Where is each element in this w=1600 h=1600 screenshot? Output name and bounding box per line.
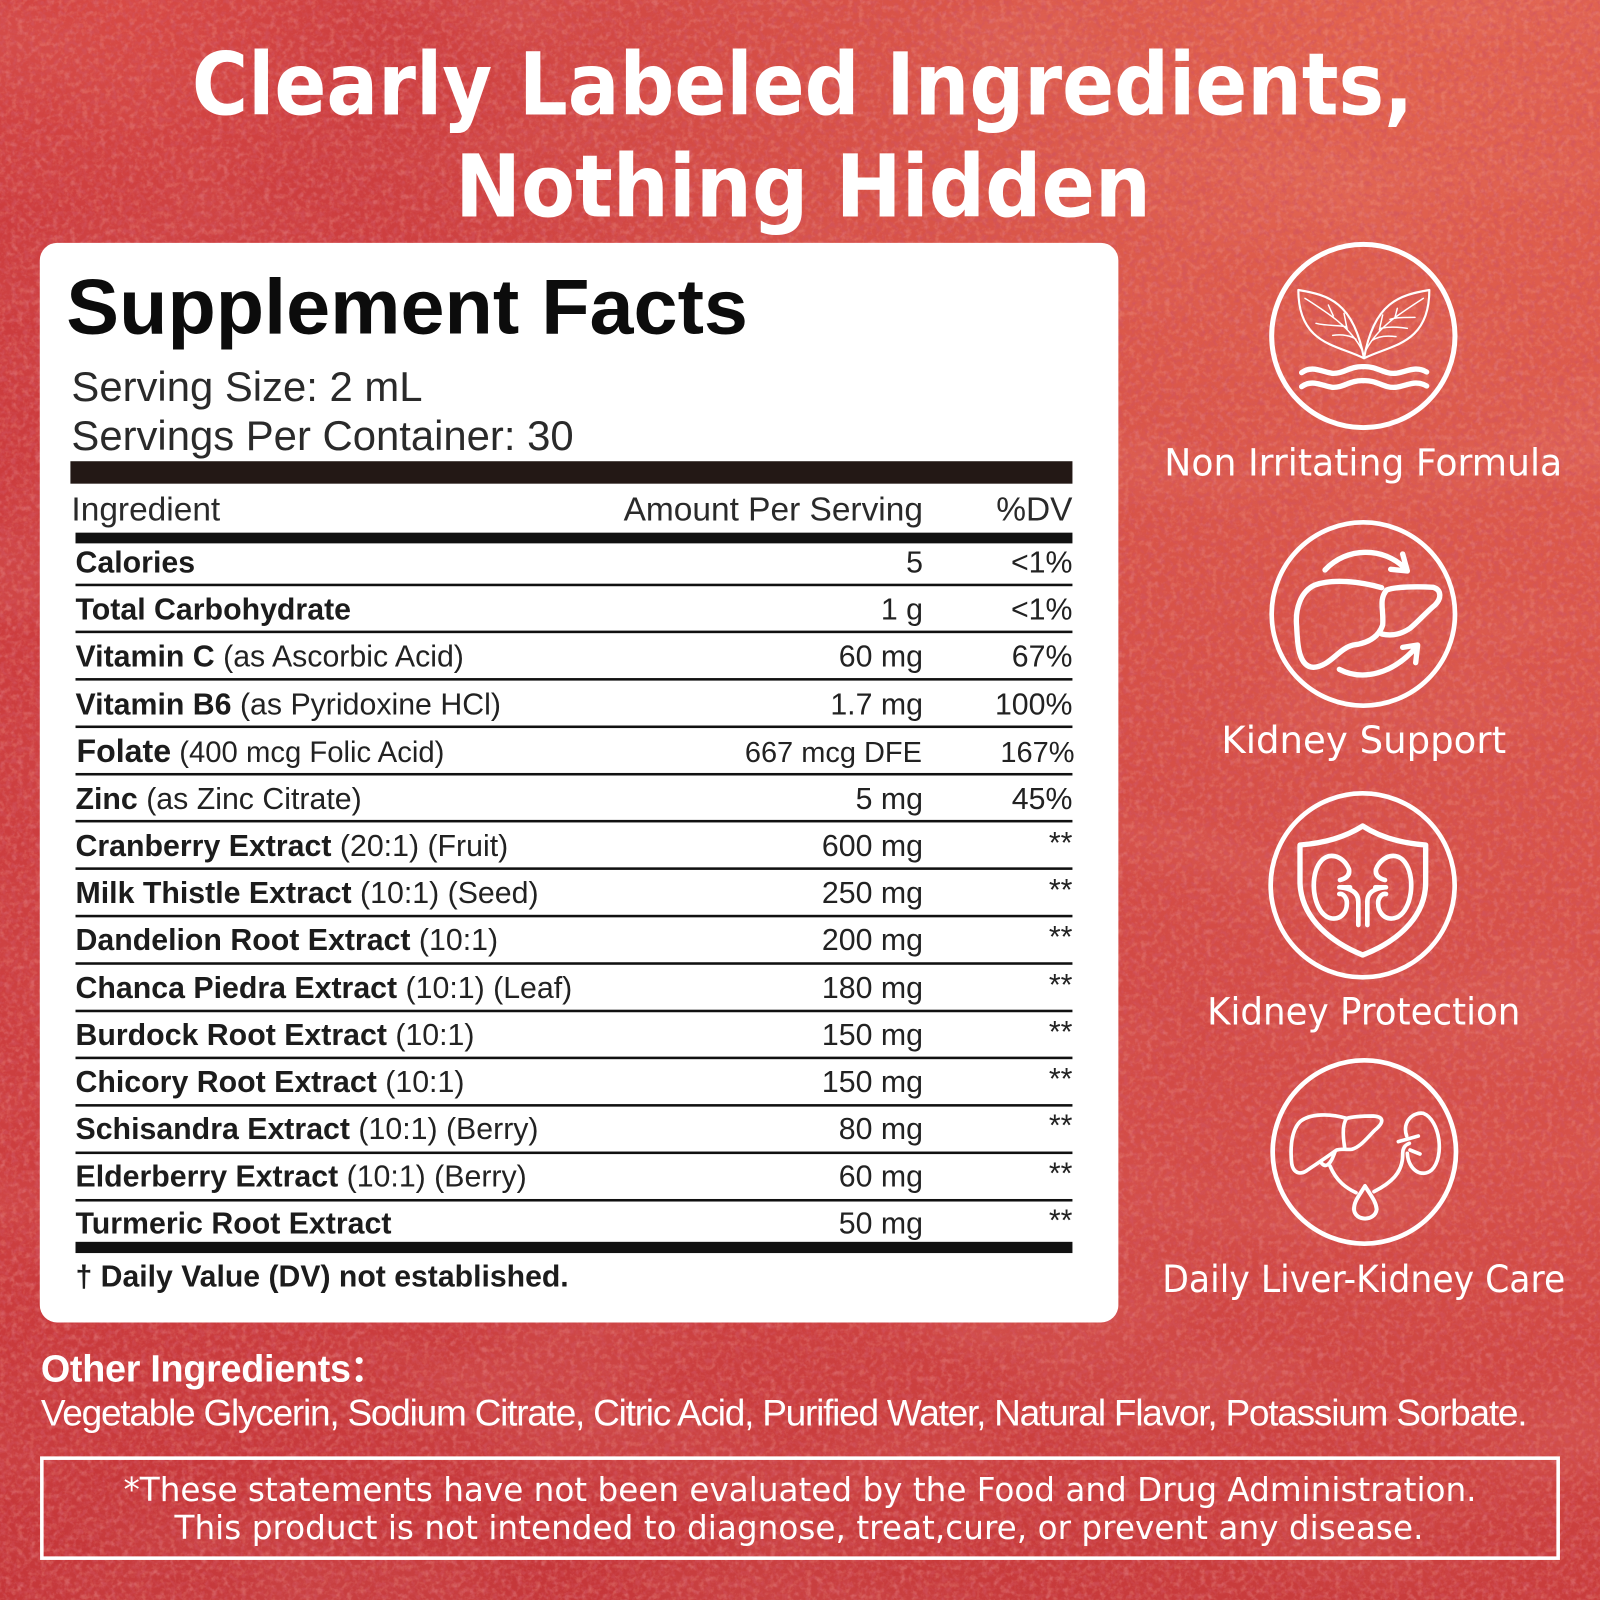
icon: shield with kidneys: [1271, 793, 1455, 977]
row: burdock: Burdock Root Extract (10:1): [76, 1019, 475, 1052]
disclaimer box: *These statements have not been evaluated by the Food and Drug Administration.: [123, 1471, 1477, 1509]
row: elderberry: Elderberry Extract (10:1) (Berry): [76, 1161, 527, 1194]
title: Nothing Hidden: [455, 136, 1151, 237]
row: burdock: [76, 1016, 1073, 1052]
row: turmeric: Turmeric Root Extract: [76, 1208, 391, 1241]
row: calories: Calories: [76, 546, 195, 579]
row: milk thistle: 250 mg: [822, 877, 923, 910]
icon: liver with arrows: [1272, 522, 1455, 706]
column headers: Ingredient: [71, 491, 221, 528]
column headers: %DV: [996, 491, 1073, 528]
row: chanca piedra: **: [1049, 969, 1073, 1002]
other ingredients: ：: [350, 1339, 387, 1393]
row: vitamin C: 60 mg: [839, 640, 923, 673]
row: calories: <1%: [1011, 546, 1072, 579]
row: folate: Folate (400 mcg Folic Acid): [77, 733, 444, 769]
row: chanca piedra: [76, 969, 1073, 1005]
row: zinc: 5 mg: [856, 783, 923, 816]
panel: supplement facts: [40, 243, 1118, 1322]
row: cranberry: Cranberry Extract (20:1) (Fruit): [76, 830, 508, 863]
icon: leaves and water: [1272, 244, 1455, 428]
icon: liver, kidney and drop: [1273, 1060, 1456, 1244]
row: schisandra: 80 mg: [839, 1113, 923, 1146]
row: vitamin B6: [76, 688, 1072, 721]
row: elderberry: 60 mg: [839, 1161, 923, 1194]
row: zinc: 45%: [1012, 783, 1072, 816]
other ingredients: [41, 1339, 1528, 1434]
title: Clearly Labeled Ingredients,: [192, 34, 1413, 135]
row: folate: 667 mcg DFE: [745, 737, 922, 769]
row: calories: 5: [906, 546, 923, 579]
row: vitamin B6: Vitamin B6 (as Pyridoxine HCl): [76, 688, 501, 721]
row: folate: 167%: [1000, 737, 1074, 769]
row: elderberry: [76, 1158, 1073, 1194]
row: calories: [76, 546, 1072, 579]
row: schisandra: **: [1049, 1110, 1073, 1143]
column headers: Amount Per Serving: [624, 491, 923, 528]
footnote: † Daily Value (DV) not established.: [76, 1261, 569, 1294]
row: turmeric: **: [1049, 1205, 1073, 1238]
icon labels: Daily Liver-Kidney Care: [1162, 1257, 1565, 1301]
row: chicory: 150 mg: [822, 1066, 923, 1099]
row: vitamin C: Vitamin C (as Ascorbic Acid): [76, 640, 464, 673]
column headers: [71, 491, 1073, 528]
table rules: [76, 533, 1072, 1253]
row: milk thistle: [76, 874, 1073, 910]
row: zinc: Zinc (as Zinc Citrate): [76, 783, 362, 816]
row: chanca piedra: 180 mg: [822, 972, 923, 1005]
heading: Supplement Facts: Supplement Facts: [66, 265, 748, 351]
row: milk thistle: **: [1049, 874, 1073, 907]
other ingredients: Vegetable Glycerin, Sodium Citrate, Citric Acid, Purified Water, Natural Flavor, Potassium Sorbate.: [41, 1392, 1528, 1434]
disclaimer box: [42, 1458, 1558, 1558]
row: folate: [77, 733, 1074, 769]
row: elderberry: **: [1049, 1158, 1073, 1191]
row: total carbohydrate: <1%: [1011, 593, 1072, 626]
serving information: [71, 363, 574, 459]
row: cranberry: [76, 827, 1073, 863]
icon labels: Kidney Support: [1221, 718, 1506, 762]
icon labels: Kidney Protection: [1207, 989, 1520, 1033]
row: dandelion: **: [1049, 921, 1073, 954]
row: dandelion: Dandelion Root Extract (10:1): [76, 924, 498, 957]
row: chanca piedra: Chanca Piedra Extract (10:1) (Leaf): [76, 972, 572, 1005]
icon labels: [1162, 441, 1565, 1301]
row: total carbohydrate: Total Carbohydrate: [76, 593, 351, 626]
row: vitamin B6: 1.7 mg: [830, 688, 923, 721]
row: total carbohydrate: [76, 593, 1072, 626]
row: burdock: **: [1049, 1016, 1073, 1049]
row: turmeric: [76, 1205, 1073, 1241]
row: vitamin C: [76, 640, 1072, 673]
serving information: Serving Size: 2 mL: [71, 363, 422, 410]
top thick bar: [70, 461, 1072, 484]
disclaimer box: This product is not intended to diagnose, treat,cure, or prevent any disease.: [173, 1509, 1423, 1547]
row: dandelion: 200 mg: [822, 924, 923, 957]
row: chicory: Chicory Root Extract (10:1): [76, 1066, 464, 1099]
title: [192, 34, 1413, 237]
row: chicory: [76, 1063, 1073, 1099]
row: vitamin C: 67%: [1012, 640, 1072, 673]
row: total carbohydrate: 1 g: [881, 593, 923, 626]
row: vitamin B6: 100%: [995, 688, 1072, 721]
row: turmeric: 50 mg: [839, 1208, 923, 1241]
row: schisandra: Schisandra Extract (10:1) (Berry): [76, 1113, 539, 1146]
row: zinc: [76, 783, 1072, 816]
row: cranberry: 600 mg: [822, 830, 923, 863]
row: burdock: 150 mg: [822, 1019, 923, 1052]
row: chicory: **: [1049, 1063, 1073, 1096]
row: schisandra: [76, 1110, 1073, 1146]
table rows: [76, 546, 1074, 1241]
serving information: Servings Per Container: 30: [71, 412, 574, 459]
row: dandelion: [76, 921, 1073, 957]
row: cranberry: **: [1049, 827, 1073, 860]
icon labels: Non Irritating Formula: [1164, 441, 1562, 485]
row: milk thistle: Milk Thistle Extract (10:1) (Seed): [76, 877, 539, 910]
other ingredients: Other Ingredients: [41, 1348, 351, 1390]
